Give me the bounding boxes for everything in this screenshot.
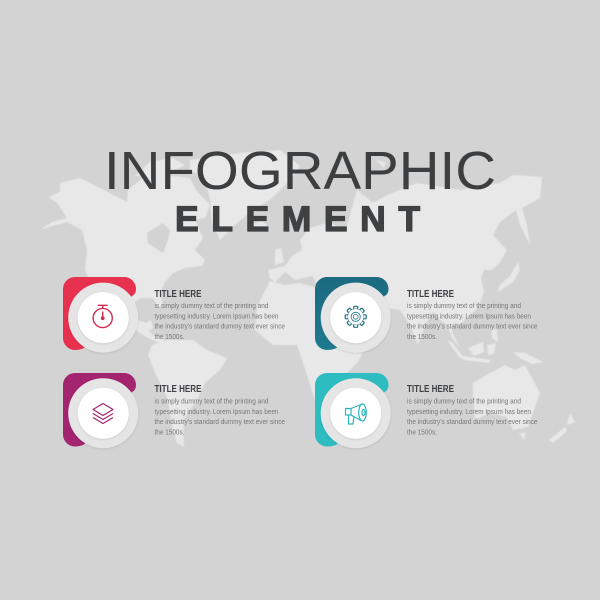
body text: typesetting industry. Lorem Ipsum has been: [407, 409, 531, 416]
body text: typesetting industry. Lorem Ipsum has been: [407, 313, 531, 320]
teal corner shape: [315, 373, 388, 447]
body text: the industry's standard dummy text ever since: [407, 324, 538, 331]
inner white circle: [330, 388, 381, 439]
body text: [154, 303, 285, 341]
body text: typesetting industry. Lorem Ipsum has been: [154, 409, 279, 416]
card: top right (dark teal): [315, 277, 538, 353]
subtitle: ELEMENT: ELEMENT: [175, 199, 420, 239]
inner white circle: [78, 292, 129, 343]
heading: TITLE HERE: [407, 384, 454, 395]
body text: the industry's standard dummy text ever since: [154, 324, 285, 331]
card: bottom left (purple): [63, 373, 285, 448]
body text: the 1500s.: [407, 334, 437, 341]
heading: TITLE HERE: [154, 289, 202, 300]
icon: stopwatch: [93, 305, 112, 328]
card: top left (red): [63, 277, 285, 353]
body text: [407, 303, 538, 341]
body text: is simply dummy text of the printing and: [154, 398, 269, 406]
red corner shape: [63, 277, 136, 350]
heading: TITLE HERE: [154, 384, 202, 395]
purple corner shape: [63, 373, 136, 447]
outer ring: [321, 283, 391, 353]
body text: [154, 398, 285, 436]
icon: layers: [93, 404, 113, 424]
body text: is simply dummy text of the printing and: [154, 303, 269, 310]
icon: megaphone: [346, 404, 366, 424]
world map: [40, 150, 575, 447]
icon: gear: [345, 306, 366, 327]
body text: the 1500s.: [154, 429, 185, 436]
outer ring: [321, 378, 391, 448]
body text: is simply dummy text of the printing and: [407, 303, 521, 310]
body text: is simply dummy text of the printing and: [407, 398, 521, 406]
inner white circle: [330, 292, 381, 343]
inner white circle: [78, 388, 129, 439]
body text: the 1500s.: [407, 429, 437, 436]
body text: the 1500s.: [154, 334, 185, 341]
body text: typesetting industry. Lorem Ipsum has been: [154, 313, 279, 320]
body text: the industry's standard dummy text ever since: [407, 419, 538, 426]
body text: the industry's standard dummy text ever since: [154, 419, 285, 426]
body text: [407, 398, 538, 436]
outer ring: [68, 378, 138, 448]
card: bottom right (teal): [315, 373, 538, 448]
outer ring: [68, 283, 138, 353]
title: INFOGRAPHIC: INFOGRAPHIC: [104, 142, 496, 201]
dark teal corner shape: [315, 277, 388, 350]
heading: TITLE HERE: [407, 289, 454, 300]
